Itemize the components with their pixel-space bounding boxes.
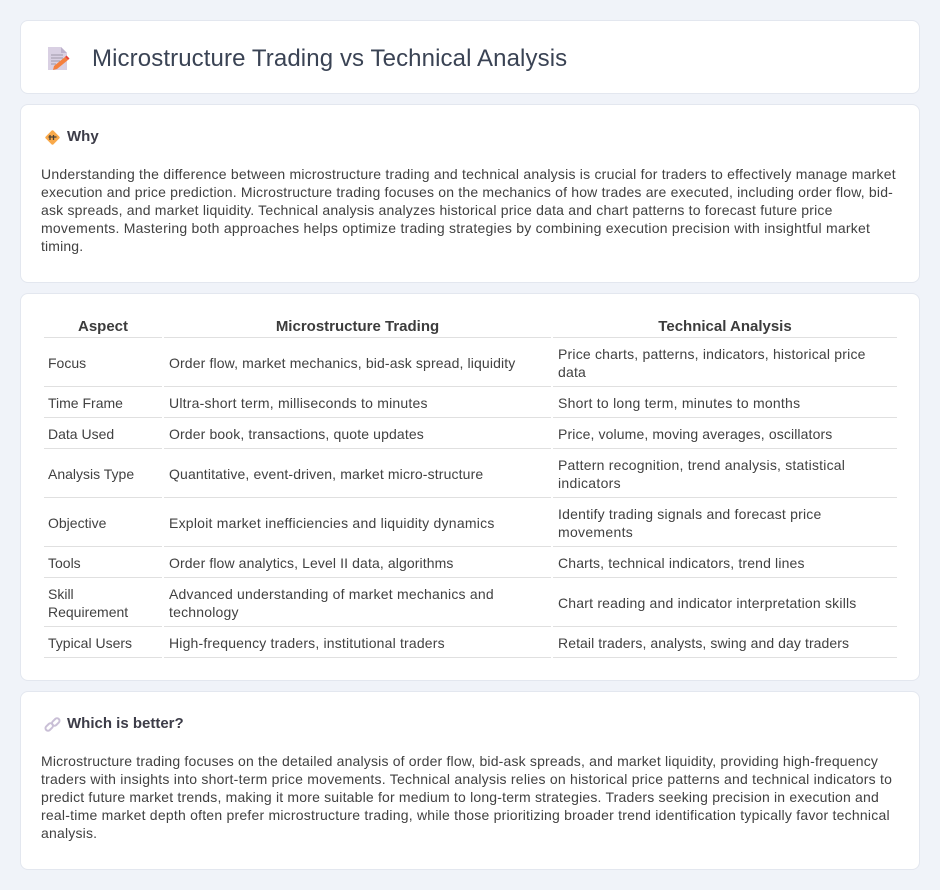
text block: which is better: predict future market trends, making it more suitable for medium to long-term strategies. Traders seeking precision in execution and [41,789,879,805]
row: time frame: Time Frame [48,395,123,411]
icon: link [44,717,60,732]
icon: warning diamond [45,130,60,145]
text block: which is better: real-time market depth often prefer microstructure trading, while those prioritizing broader trend identification typically favor technical [41,807,890,823]
heading: why: Why [67,128,99,145]
row: skill requirement: Requirement [48,604,128,620]
row: analysis type: Quantitative, event-driven, market micro-structure [169,466,483,482]
row: focus: Order flow, market mechanics, bid-ask spread, liquidity [169,355,515,371]
row: data used: Price, volume, moving averages, oscillators [558,426,832,442]
row: tools: Tools [48,555,81,571]
text block: which is better [41,753,892,841]
row: skill requirement: Skill [48,586,74,602]
text block: which is better: Microstructure trading focuses on the detailed analysis of order flow, bid-ask spreads, and market liquidity, providing high-frequency [41,753,878,769]
row: analysis type: Pattern recognition, trend analysis, statistical [558,457,845,473]
row: tools: Order flow analytics, Level II data, algorithms [169,555,454,571]
icon: document with pencil [48,47,70,70]
text block: which is better: analysis. [41,825,97,841]
row: focus: Price charts, patterns, indicators, historical price [558,346,866,362]
table header row: Technical Analysis [658,318,792,335]
row: typical users: High-frequency traders, institutional traders [169,635,445,651]
panel: comparison table [20,293,920,681]
text block: why: movements. Mastering both approaches helps optimize trading strategies by combining execution precision with insightful market [41,220,870,236]
row: objective: movements [558,524,633,540]
row: data used [44,426,897,449]
panel: header [20,20,920,94]
row: skill requirement [44,586,897,627]
text block: why: ask spreads, and market liquidity. Technical analysis analyzes historical price data and chart patterns to forecast future price [41,202,833,218]
row: typical users: Typical Users [48,635,132,651]
row: time frame: Ultra-short term, milliseconds to minutes [169,395,428,411]
row: time frame [44,395,897,418]
text block: why [41,166,896,254]
row: typical users: Retail traders, analysts, swing and day traders [558,635,849,651]
row: focus: Focus [48,355,86,371]
row: analysis type [44,457,897,498]
row: skill requirement: Chart reading and indicator interpretation skills [558,595,857,611]
row: objective: Identify trading signals and forecast price [558,506,822,522]
row: skill requirement: technology [169,604,239,620]
row: analysis type: Analysis Type [48,466,134,482]
row: objective: Objective [48,515,106,531]
row: data used: Order book, transactions, quote updates [169,426,424,442]
heading: which is better: Which is better? [67,715,184,732]
text block: why: Understanding the difference between microstructure trading and technical analysis is crucial for traders to effectively manage market [41,166,896,182]
row: skill requirement: Advanced understanding of market mechanics and [169,586,494,602]
row: data used: Data Used [48,426,114,442]
table header row [44,318,897,338]
row: objective: Exploit market inefficiencies and liquidity dynamics [169,515,495,531]
row: tools [44,555,897,578]
table header row: Aspect [78,318,128,335]
row: focus [44,346,897,387]
row: focus: data [558,364,586,380]
row: analysis type: indicators [558,475,621,491]
text block: why: execution and price prediction. Microstructure trading focuses on the mechanics of how trades are executed, including order flow, bid- [41,184,893,200]
row: tools: Charts, technical indicators, trend lines [558,555,805,571]
row: typical users [44,635,897,658]
text block: why: timing. [41,238,83,254]
table header row: Microstructure Trading [276,318,439,335]
text block: which is better: traders with insights into short-term price movements. Technical analysis relies on historical price patterns and technical indicators to [41,771,892,787]
panel: why [20,104,920,283]
panel: which is better [20,691,920,870]
row: objective [44,506,897,547]
title: Microstructure Trading vs Technical Analysis [92,45,567,72]
row: time frame: Short to long term, minutes to months [558,395,800,411]
